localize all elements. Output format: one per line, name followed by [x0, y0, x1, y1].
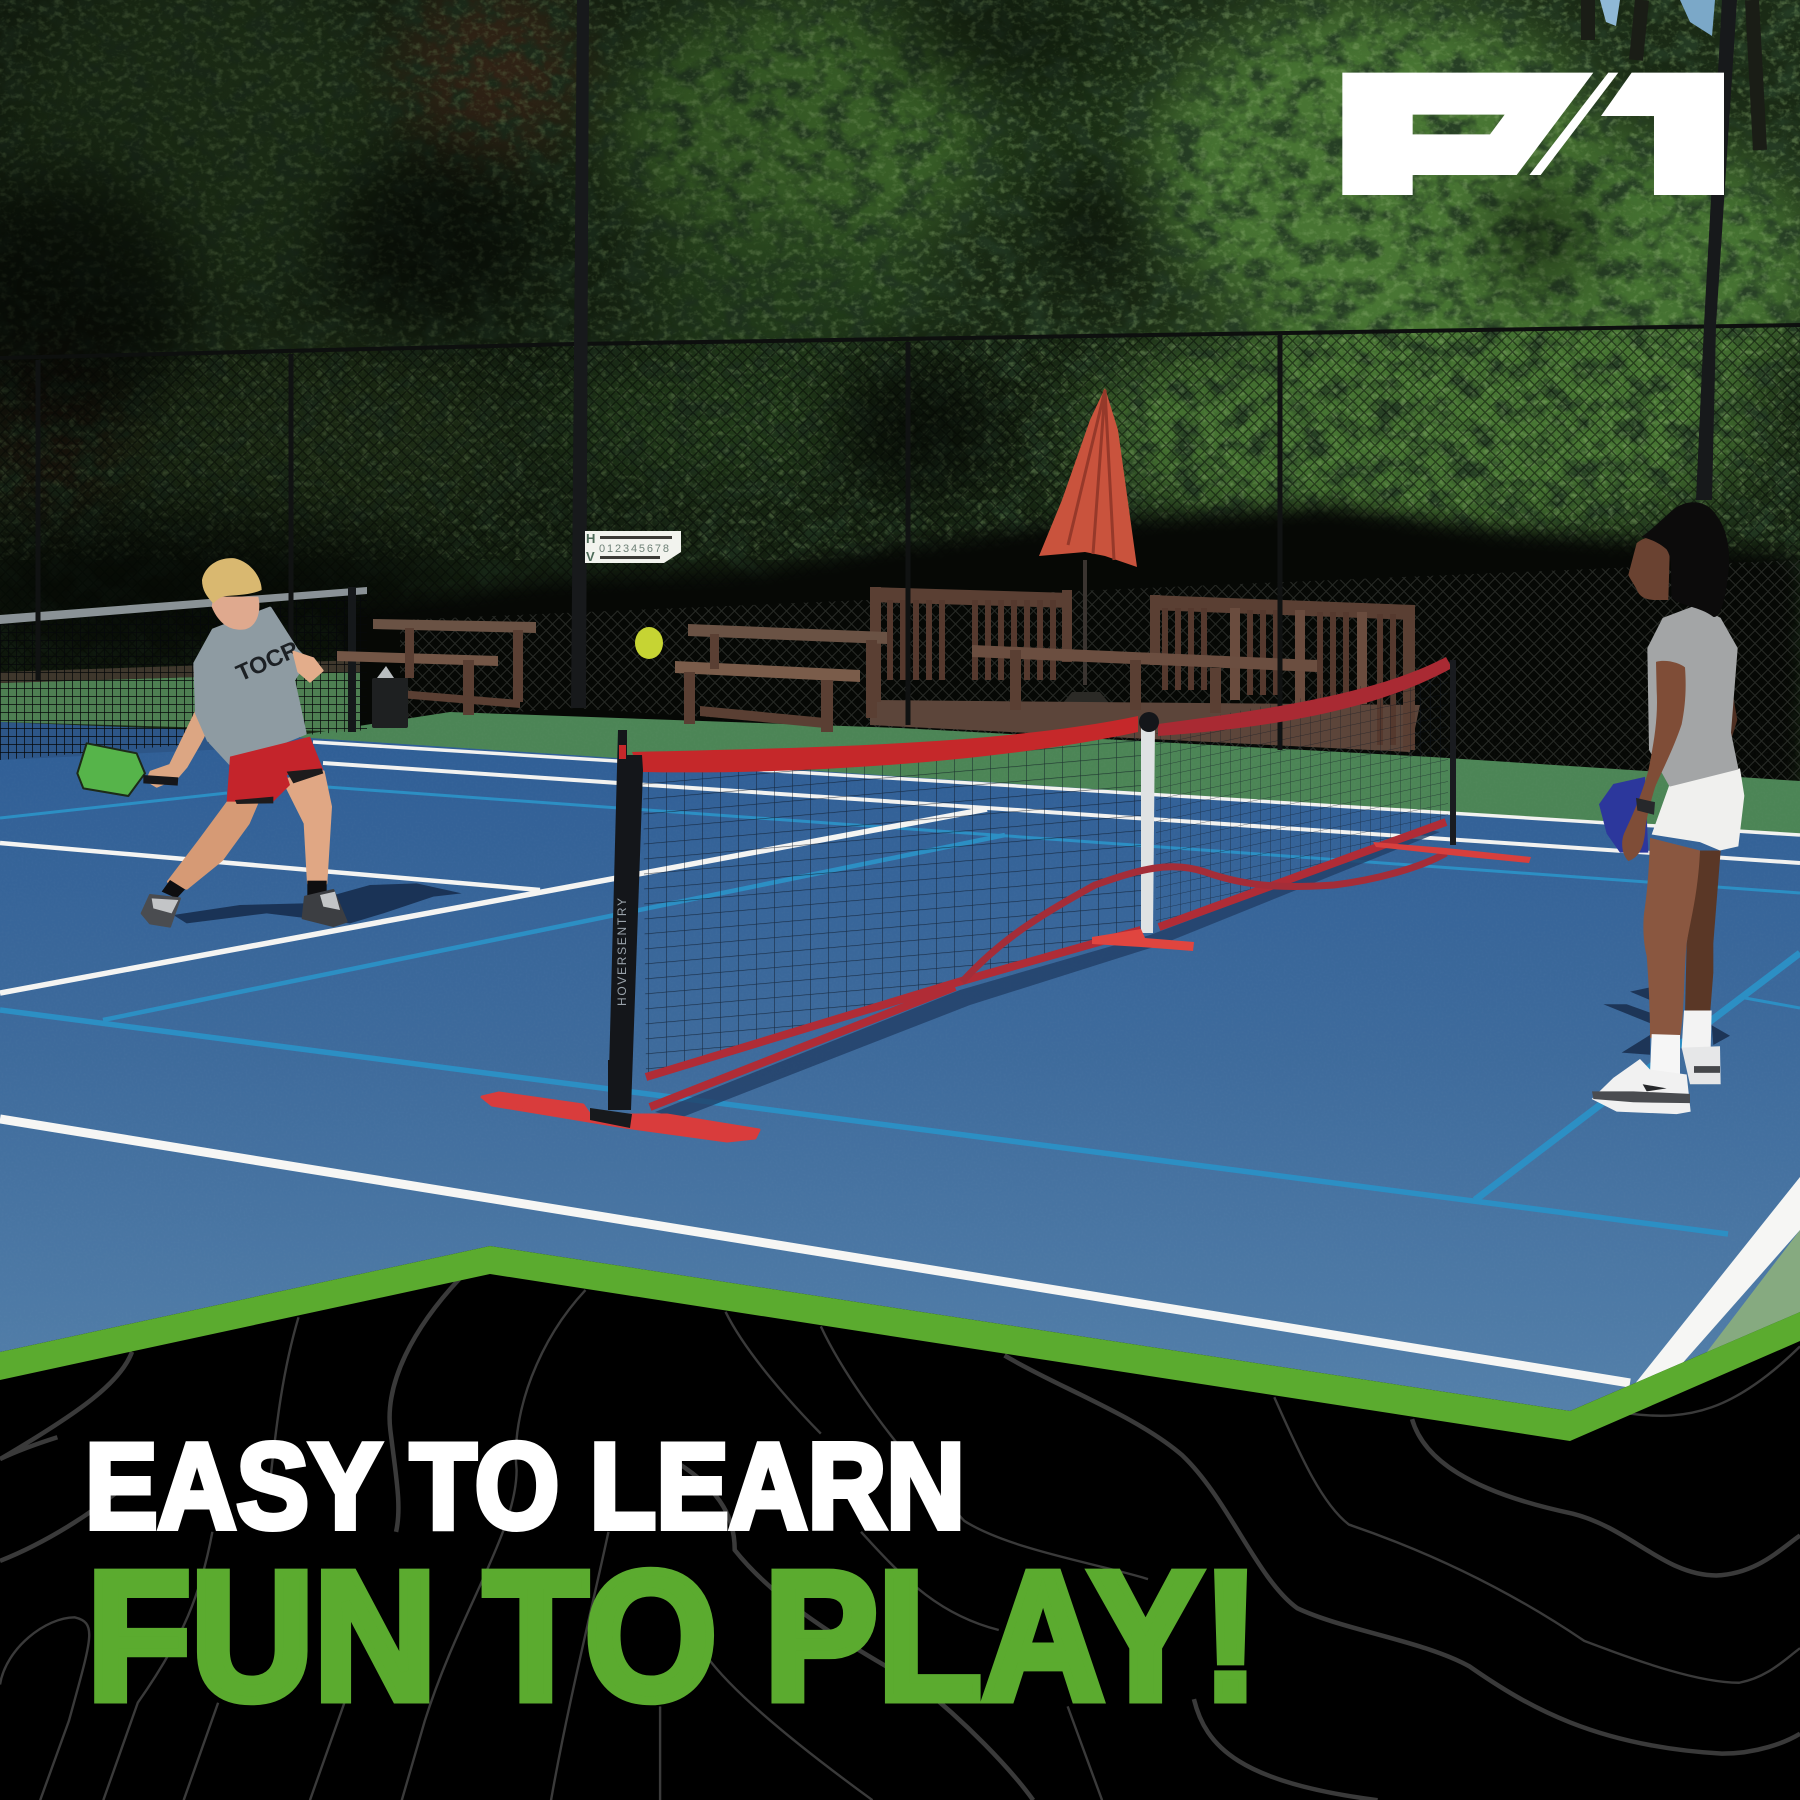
boy shadow — [173, 883, 462, 923]
blue court surface — [0, 722, 1800, 1460]
boy shirt — [195, 608, 307, 763]
neighbouring court behind boy — [0, 587, 367, 760]
girl front shoe — [1592, 1059, 1691, 1114]
left side shading — [0, 0, 1800, 720]
court score sign: V — [586, 549, 595, 564]
girl back sock and shoe — [1682, 1011, 1712, 1048]
centre picnic table — [688, 624, 887, 644]
chain-link fence mesh — [0, 325, 1800, 781]
paddle green — [77, 743, 145, 796]
girl arm — [1622, 661, 1686, 861]
net mesh — [643, 730, 1141, 1078]
net base cords — [646, 822, 1446, 1107]
green chevron band — [0, 1246, 1800, 1441]
portable net — [482, 657, 1531, 1141]
sky gaps and trunks top right — [1600, 0, 1620, 26]
dark hedge behind fence — [340, 505, 1800, 800]
girl shadows — [1603, 1004, 1650, 1023]
right post — [1450, 660, 1456, 845]
net shadow — [655, 830, 1440, 1118]
paddle blue — [1599, 777, 1648, 853]
contour lines pattern — [0, 1279, 1800, 1800]
boy hair — [202, 558, 262, 603]
pickleball in flight — [635, 627, 663, 659]
boy player: TOCR — [232, 636, 303, 686]
boy socks — [162, 880, 185, 898]
umbrella — [1039, 388, 1137, 704]
net top band — [632, 716, 1138, 772]
girl front sock — [1650, 1034, 1680, 1082]
headline: fun to play: FUN TO PLAY! — [87, 1533, 1259, 1738]
boy shorts — [227, 737, 323, 802]
court score sign: H — [586, 531, 595, 546]
boy shoes — [142, 895, 180, 927]
centre foot — [1092, 929, 1194, 951]
bottom black panel — [0, 1274, 1800, 1800]
trash can — [372, 666, 408, 728]
girl hair — [1642, 502, 1729, 617]
foliage shade — [0, 0, 1590, 660]
girl head — [1628, 537, 1670, 600]
left foot — [482, 1093, 759, 1141]
centre post — [1141, 722, 1155, 933]
girl watch — [1636, 798, 1655, 815]
green court surround — [300, 712, 1800, 834]
left picnic table — [373, 619, 536, 633]
girl shorts — [1652, 768, 1744, 851]
girl back leg — [1685, 851, 1721, 1015]
court score sign: 012345678 — [599, 543, 669, 555]
girl player — [1592, 502, 1744, 1114]
left post — [608, 730, 643, 1110]
far corner white line and green apron — [1636, 1177, 1800, 1383]
right foot — [1373, 842, 1531, 863]
boy legs — [168, 800, 258, 888]
court score sign — [585, 531, 681, 564]
girl far arm — [1723, 678, 1737, 743]
boy head — [212, 597, 259, 630]
girl shirt — [1648, 606, 1737, 785]
wooden benches and picnic tables — [337, 587, 1420, 752]
boy left hand — [293, 652, 323, 682]
boy right arm — [147, 710, 215, 787]
headline: easy to learn: EASY TO LEARN — [85, 1418, 965, 1554]
brand logo: P1 — [1342, 73, 1724, 195]
boy player — [77, 558, 462, 927]
portable net: HOVERSENTRY — [615, 898, 629, 1006]
girl front leg — [1643, 838, 1700, 1038]
fence rail and poles — [0, 0, 1800, 750]
background trees — [0, 0, 1800, 800]
court lines — [0, 742, 1800, 1383]
